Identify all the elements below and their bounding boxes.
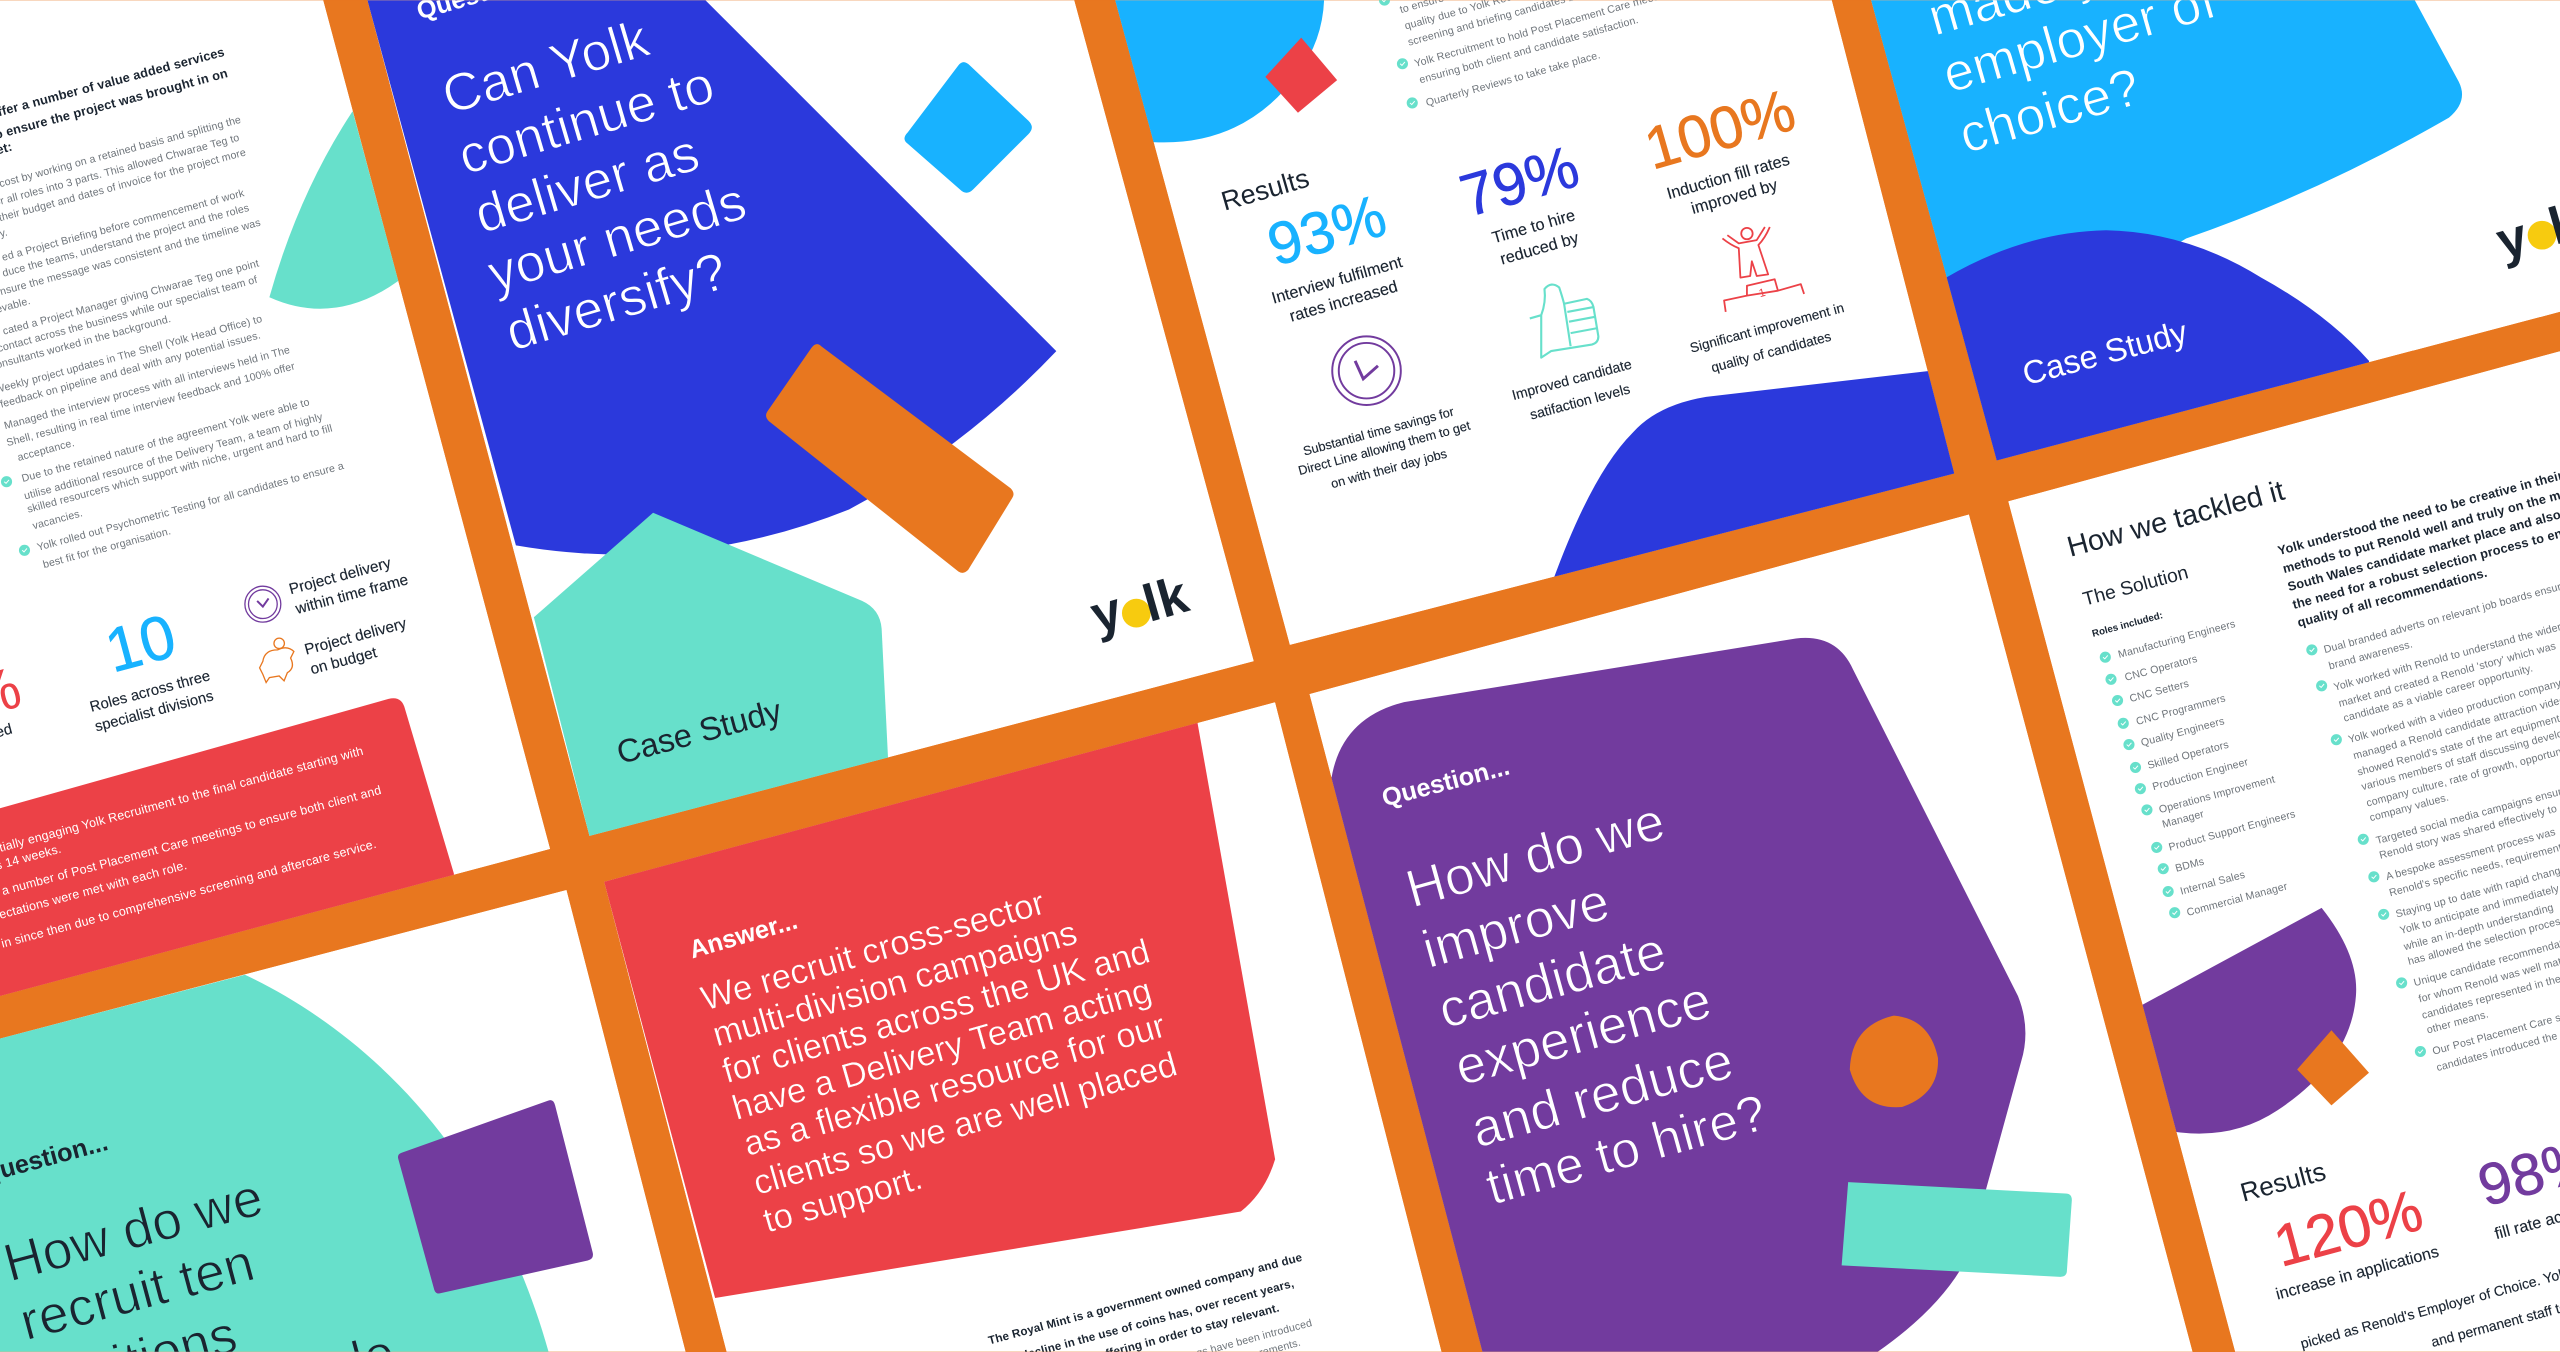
answer text: have a Delivery Team acting — [728, 972, 1156, 1128]
heading: How do we — [1400, 792, 1671, 919]
icon captions: satifaction levels — [1528, 380, 1632, 423]
heading: results: Results — [2237, 1156, 2329, 1208]
orange rectangle — [766, 344, 1014, 573]
body bullets: nsure the message was consistent and the timeline was — [0, 217, 262, 298]
body bullets: feedback on pipeline and deal with any potential issues. — [0, 329, 262, 411]
panel: page 4 employer of choice — [1871, 0, 2560, 474]
icon: thumbs up — [1530, 285, 1598, 358]
body bullets: Yolk rolled out Psychometric Testing for all candidates to ensure a — [36, 460, 345, 554]
logo: yolk: lk — [1137, 566, 1195, 634]
panel: page 1 approach and results — [0, 0, 550, 1004]
stat label: roles — [90, 673, 214, 732]
blue blob — [367, 0, 1056, 555]
delivery budget text: on budget — [308, 644, 379, 678]
icon: clock — [1332, 336, 1401, 405]
stat label: applications: increase in applications — [2274, 1243, 2441, 1304]
stat label: roles: Roles across three — [88, 668, 212, 716]
roles list: Manufacturing Engineers — [2117, 618, 2237, 661]
solution bullets: candidates represented in the — [2421, 973, 2560, 1022]
solution bullets: Yolk to anticipate and immediately — [2398, 883, 2560, 937]
body bullets: utilise additional resource of the Delivery Team, a team of highly — [23, 411, 325, 502]
heading: candidate — [1432, 921, 1673, 1040]
logo: yolk — [2490, 188, 2560, 271]
red panel — [604, 718, 1275, 1298]
stat labels — [1270, 151, 1792, 326]
stat label: roles: specialist divisions — [93, 688, 215, 735]
purple square — [398, 1100, 593, 1294]
intro paragraph: quality of all recommendations. — [2296, 565, 2489, 630]
stat: 10 roles: 10 — [98, 602, 183, 686]
body bullets: acceptance. — [16, 437, 76, 464]
heading: choice? — [1953, 57, 2147, 165]
solution bullets: Yolk worked with Renold to understand the wider — [2332, 621, 2560, 694]
icon captions: Substantial time savings for — [1301, 404, 1456, 458]
stat: 100%: 100% — [1637, 76, 1802, 182]
heading: How we tackled it — [2064, 475, 2288, 564]
body bullets: vacancies. — [31, 507, 84, 532]
heading: How do we — [0, 1168, 269, 1293]
teal blob — [534, 513, 888, 836]
purple shape — [1331, 638, 2025, 1352]
icon: piggy bank — [260, 638, 294, 683]
delivery budget text — [304, 620, 406, 674]
red diamond — [1265, 38, 1337, 113]
roles list: Operations Improvement — [2158, 773, 2276, 816]
heading: continue to — [452, 55, 721, 186]
solution bullets: showed Renold's state of the art equipment — [2356, 713, 2560, 778]
blue corner shape — [1553, 371, 1956, 581]
roles list: Internal Sales — [2179, 869, 2246, 898]
roles list: Skilled Operators — [2146, 739, 2230, 772]
panel: page 8 question — [0, 890, 686, 1352]
red panel — [0, 698, 454, 1004]
heading — [1400, 792, 1773, 1216]
red panel text — [0, 744, 383, 951]
bullets list — [1379, 0, 1677, 109]
logo: yolk: y — [1084, 581, 1128, 645]
label: answer: Answer... — [686, 907, 801, 964]
panel: page 2 question — [367, 0, 1254, 836]
label: question: Question... — [1379, 753, 1513, 812]
stat labels: Time to hire — [1490, 206, 1577, 247]
icon captions: Direct Line allowing them to get — [1296, 418, 1472, 478]
delivery budget text: Project delivery — [303, 615, 409, 659]
stat labels: rates increased — [1288, 278, 1400, 326]
roles list — [2100, 618, 2297, 919]
stat labels: Interview fulfilment — [1270, 253, 1405, 308]
icon captions — [1296, 300, 1846, 491]
intro paragraph: The Royal Mint is a government owned company and due — [987, 1252, 1304, 1347]
heading — [0, 1168, 401, 1352]
stat: 79%: 79% — [1453, 132, 1586, 230]
solution bullets: Renold story was shared effectively to — [2378, 803, 2558, 862]
bullet ticks — [1, 476, 30, 556]
stat labels: improved by — [1689, 176, 1780, 218]
roles list: CNC Operators — [2123, 653, 2199, 684]
body bullets: ed a Project Briefing before commencement of work — [1, 187, 246, 264]
stat labels: reduced by — [1498, 229, 1582, 268]
heading: improve — [1416, 872, 1616, 980]
body bullets: Managed the interview process with all interviews held in The — [3, 344, 291, 432]
icon captions: Improved candidate — [1510, 356, 1633, 403]
solution bullets: Yolk worked with a video production company — [2347, 677, 2560, 746]
body bullets: cost by working on a retained basis and splitting the — [0, 114, 242, 190]
red panel text: in since then due to comprehensive screening and aftercare service. — [0, 837, 378, 951]
roles list: Product Support Engineers — [2167, 808, 2297, 854]
delivery time text — [289, 559, 408, 614]
icon: clock — [245, 586, 281, 622]
blue blob — [1946, 230, 2371, 474]
heading: diversify? — [499, 241, 734, 363]
icon: podium winner: 1 — [1758, 287, 1767, 300]
answer text: clients so we are well placed — [749, 1045, 1181, 1203]
roles label: Roles included: — [2091, 610, 2164, 640]
subheading: The Solution — [2081, 562, 2191, 611]
body bullets — [0, 114, 345, 571]
red panel text: a number of Post Placement Care meetings to ensure both client and — [0, 783, 383, 898]
orange circle — [1850, 1016, 1938, 1107]
body bullets: cated a Project Manager giving Chwarae Teg one point — [1, 258, 260, 338]
case study label: Case Study — [2018, 313, 2192, 392]
body bullets: Due to the retained nature of the agreement Yolk were able to — [20, 396, 311, 485]
roles list: CNC Programmers — [2135, 692, 2227, 728]
answer text: multi-division campaigns — [708, 914, 1081, 1054]
stat: 93%: 93% — [1260, 181, 1393, 279]
body bullets: Weekly project updates in The Shell (Yolk Head Office) to — [0, 313, 264, 396]
heading: your needs — [481, 172, 753, 304]
body bullets: contact across the business while our specialist team of — [0, 274, 259, 355]
body bullets: skilled resourcers which support with niche, urgent and hard to fill — [26, 422, 334, 516]
body bullets: Shell, resulting in real time interview feedback and 100% offer — [5, 360, 297, 449]
solution bullets: other means. — [2425, 1008, 2490, 1036]
logo: yolk — [1090, 578, 1192, 643]
roles list: CNC Setters — [2128, 678, 2190, 705]
answer text — [697, 884, 1181, 1240]
logo: yolk: y — [2490, 207, 2534, 271]
panel: page 6 question — [1309, 514, 2193, 1352]
solution bullets: company values. — [2368, 791, 2450, 824]
icon: podium winner — [1722, 227, 1804, 312]
stat labels: Induction fill rates — [1665, 151, 1792, 203]
roles list: BDMs — [2174, 856, 2206, 875]
body bullets: best fit for the organisation. — [42, 525, 172, 571]
heading: and reduce — [1465, 1031, 1740, 1159]
solution bullets: brand awareness. — [2327, 638, 2414, 672]
answer text: as a flexible resource for our — [739, 1007, 1170, 1164]
heading: deliver as — [468, 123, 706, 245]
heading: experience — [1449, 970, 1718, 1097]
delivery time text: within time frame — [293, 571, 410, 618]
intro paragraph — [2276, 451, 2560, 630]
bullets list: ensuring both client and candidate satisfaction. — [1418, 14, 1640, 86]
solution bullets: A bespoke assessment process was — [2385, 826, 2557, 883]
panel: page 3 results — [1115, 0, 1956, 645]
answer text: to support. — [759, 1159, 927, 1240]
solution bullets: candidates introduced the — [2435, 1030, 2559, 1074]
body bullets: their budget and dates of invoice for the project more — [0, 146, 247, 224]
bullets list: Quarterly Reviews to take take place. — [1425, 49, 1602, 109]
roles list: Quality Engineers — [2140, 715, 2226, 749]
teal blob — [269, 111, 398, 309]
panel: page 7 how we tackled it — [2008, 351, 2560, 1352]
orange diamond — [2297, 1030, 2369, 1105]
answer text: for clients across the UK and — [718, 933, 1154, 1091]
heading — [446, 23, 746, 348]
heading: Can Yolk — [436, 9, 656, 126]
delivery time text: Project delivery — [287, 555, 393, 598]
teal rectangle — [1842, 1182, 2072, 1277]
icon captions: on with their day jobs — [1329, 446, 1448, 491]
icon captions: Significant improvement in — [1688, 300, 1846, 356]
heading: results: Results — [1218, 163, 1312, 216]
heading: recruit ten — [14, 1233, 261, 1352]
stat: 120%: 120% — [2267, 1178, 2429, 1280]
solution bullets: while an in-depth understanding — [2402, 902, 2555, 953]
body bullets: onsultants worked in the background. — [0, 313, 172, 371]
heading — [1922, 0, 2223, 165]
panel: page 5 answer — [604, 702, 1442, 1352]
roles list: Production Engineer — [2151, 756, 2250, 793]
heading: time to hire? — [1480, 1083, 1773, 1216]
icon captions: quality of candidates — [1710, 329, 1833, 375]
light blue blob — [1115, 0, 1324, 142]
light blue diamond — [904, 62, 1032, 193]
roles list: Commercial Manager — [2185, 880, 2289, 919]
body bullets: duce the teams, understand the project and the roles — [1, 202, 251, 280]
purple blob — [2122, 908, 2356, 1134]
case study label: Case Study — [613, 691, 786, 771]
answer text: We recruit cross-sector — [697, 884, 1049, 1018]
teal blob — [0, 975, 549, 1352]
solution bullets: candidate as a viable career opportunity. — [2342, 662, 2534, 725]
solution bullets: market and created a Renold 'story' which was — [2337, 640, 2557, 710]
light blue shape — [1871, 0, 2462, 327]
solution bullets — [2306, 577, 2560, 1074]
roles list: Manager — [2161, 808, 2206, 831]
